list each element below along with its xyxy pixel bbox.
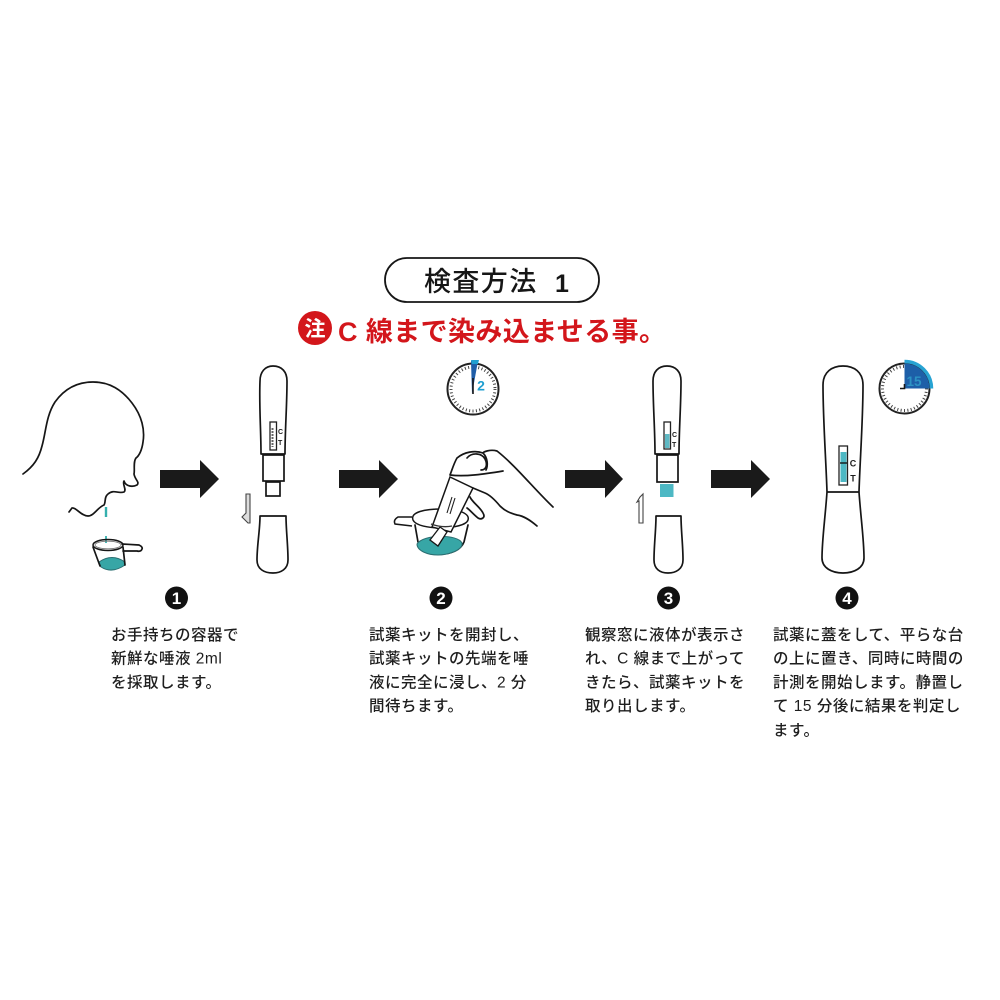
warning note: 注 [304, 318, 326, 341]
step 2 text: 液に完全に浸し、2 分 [369, 674, 527, 692]
illustration: test kit with teal tip, step 3 [637, 366, 683, 573]
icon: 2 minute timer [448, 360, 498, 414]
step 3 text [585, 625, 745, 715]
step 3 number: 3 [664, 589, 673, 608]
step 4 text: 計測を開始します。静置し [773, 674, 963, 692]
step 1 number: 1 [172, 589, 181, 608]
icon: measuring cup with saliva [93, 540, 142, 570]
step 3 text: 観察窓に液体が表示さ [585, 625, 745, 644]
step 3 text: れ、C 線まで上がって [585, 648, 745, 668]
step 4 text [773, 626, 964, 740]
step 2 number [430, 586, 452, 610]
icon: 15 minute timer [880, 362, 932, 414]
step 2 text: 間待ちます。 [369, 697, 463, 715]
step 4 text: の上に置き、同時に時間の [773, 650, 964, 668]
illustration: capped test kit, step 4 [822, 366, 864, 573]
step 1 text: を採取します。 [111, 674, 221, 692]
illustration: capped test kit, step 4: T [850, 474, 856, 484]
step 3 number [657, 586, 680, 610]
arrow 3 [565, 460, 623, 498]
arrow 4 [711, 460, 770, 498]
step 3 text: 取り出します。 [585, 697, 695, 715]
illustration: capped test kit, step 4: C [850, 458, 857, 468]
illustration: hand dipping test kit into cup [394, 450, 553, 555]
step 1 number [165, 586, 188, 610]
step 1 text [111, 626, 239, 692]
warning note: C 線まで染み込ませる事。 [338, 317, 666, 347]
title pill [385, 258, 599, 302]
title pill: 1 [555, 270, 569, 298]
step 2 text: 試薬キットの先端を唾 [369, 650, 529, 668]
step 4 text: 試薬に蓋をして、平らな台 [773, 626, 964, 644]
step 1 text: お手持ちの容器で [111, 626, 239, 644]
illustration: test kit opened, step 1 [242, 366, 288, 573]
step 2 text [369, 626, 529, 715]
step 2 text: 試薬キットを開封し、 [369, 626, 529, 644]
illustration: test kit with teal tip, step 3: C [672, 432, 677, 439]
arrow 1 [160, 460, 219, 498]
step 4 number: 4 [842, 589, 852, 608]
illustration: test kit with teal tip, step 3: T [672, 442, 677, 449]
step 3 text: きたら、試薬キットを [585, 674, 745, 692]
step 4 text: ます。 [773, 722, 819, 740]
icon: 15 minute timer: 15 [906, 374, 922, 389]
icon: 2 minute timer: 2 [477, 378, 485, 394]
illustration: test kit opened, step 1: C [278, 429, 283, 436]
step 1 text: 新鮮な唾液 2ml [111, 650, 222, 668]
step 2 number: 2 [436, 589, 446, 608]
step 4 text: て 15 分後に結果を判定し [773, 697, 961, 715]
arrow 2 [339, 460, 398, 498]
step 4 number [836, 586, 858, 610]
title pill: 検査方法 [424, 260, 538, 299]
illustration: head profile with saliva [23, 382, 144, 543]
illustration: test kit opened, step 1: T [278, 440, 283, 447]
